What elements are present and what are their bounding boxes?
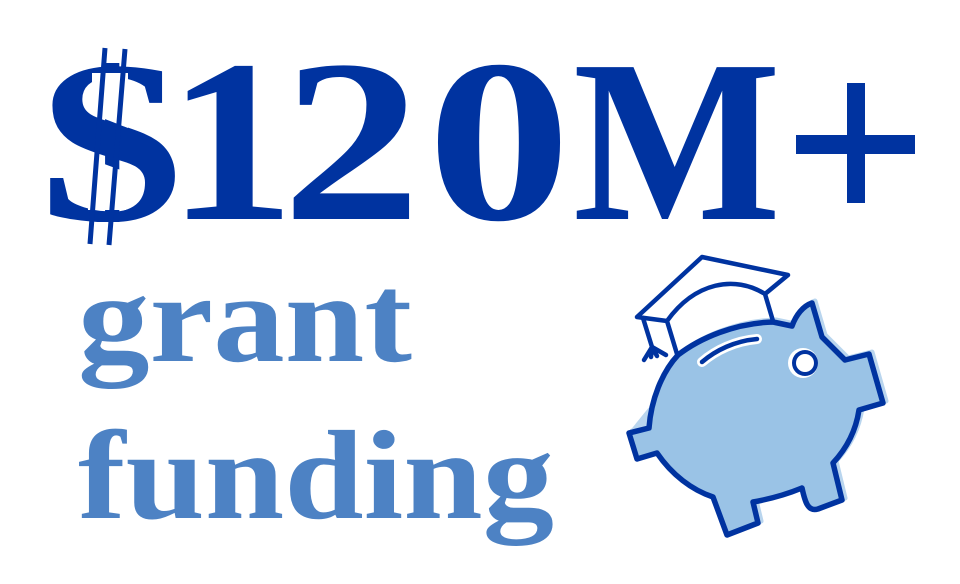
label: grant: grant [78, 249, 412, 389]
pig highlight [702, 339, 757, 362]
graduation cap [637, 257, 788, 360]
digit 2: 2 [282, 13, 421, 270]
icon: piggy bank with graduation cap [629, 257, 886, 535]
pig shadow [632, 301, 886, 533]
pig eye [788, 348, 818, 378]
digit 1: 1 [167, 13, 295, 270]
title: $120M+ [40, 13, 781, 271]
pig body [629, 303, 883, 535]
digit 0: 0 [427, 13, 571, 270]
plus sign [796, 83, 915, 203]
label: funding: funding [78, 406, 554, 546]
letter M: M [573, 13, 781, 270]
dollar sign: $ [40, 14, 183, 271]
